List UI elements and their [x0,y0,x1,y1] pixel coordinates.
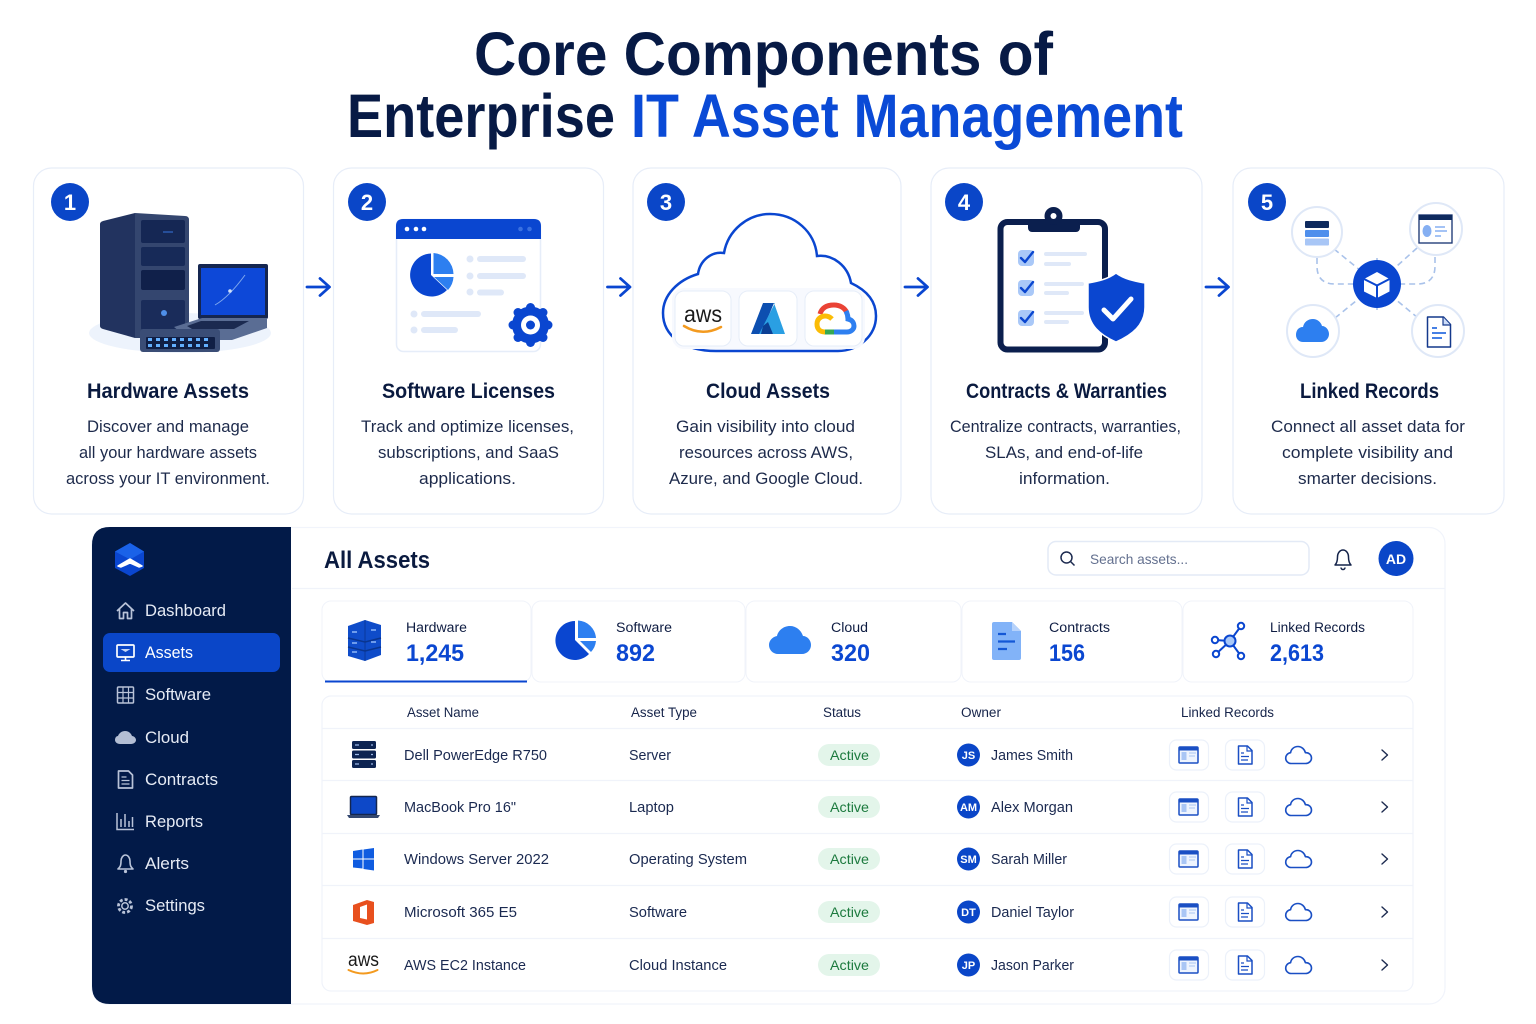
description: information. [1019,469,1110,488]
row: Microsoft 365 E5: Daniel Taylor [991,905,1074,921]
nav: software: Software [145,685,211,704]
nav: software [118,685,211,704]
row: Microsoft 365 E5: DT [961,907,976,919]
icon: cloud [769,626,811,654]
stat: hardware [322,601,531,682]
row: MacBook Pro: Active [830,799,869,815]
panel: contracts and warranties [931,168,1202,514]
row: Microsoft 365 E5: Active [830,904,869,920]
row: AWS EC2 Instance: Active [830,957,869,973]
title [347,20,1183,150]
row: Dell PowerEdge R750: JS [962,750,975,762]
aws logo: aws [684,301,722,327]
row: AWS EC2 Instance [348,950,1388,980]
row: Dell PowerEdge R750: Active [830,747,869,763]
panel: linked records [1233,168,1504,514]
table header: Asset Name [407,705,479,720]
nav: reports [117,812,203,831]
table header: Status [823,705,861,720]
stat: cloud: Cloud [831,620,868,635]
table header: Linked Records [1181,705,1274,720]
icon: laptop [347,796,380,818]
arrow 4 [1206,278,1228,296]
sidebar [92,527,291,1004]
icon: clipboard and shield [1000,207,1145,350]
row: Windows Server 2022: Sarah Miller [991,852,1067,868]
row: AWS EC2 Instance: JP [962,960,975,972]
icon: aws: aws [348,950,379,971]
search box [1048,542,1309,575]
stat: contracts: Contracts [1049,620,1110,635]
arrow 2 [608,278,630,296]
heading: Cloud Assets [706,380,830,403]
nav: settings [118,896,205,915]
icon: document [992,622,1021,660]
row: AWS EC2 Instance: Jason Parker [991,958,1074,974]
row: MacBook Pro [347,792,1388,822]
nav: cloud: Cloud [145,728,189,747]
table header: Owner [961,705,1002,720]
stat: contracts [962,601,1182,682]
stat: cloud: 320 [831,640,870,667]
page heading: All Assets [324,547,430,574]
nav: assets: Assets [145,643,193,662]
description [950,417,1181,488]
badge 1 [51,183,89,221]
row: MacBook Pro: Alex Morgan [991,800,1073,816]
row: Windows Server 2022: Active [830,851,869,867]
stat: hardware: Hardware [406,620,467,635]
stat: hardware: 1,245 [406,640,464,667]
row: Windows Server 2022: Operating System [629,852,747,868]
description: Azure, and Google Cloud. [669,469,863,488]
description [361,417,574,488]
badge 3: 3 [660,190,672,215]
icon: server tower, laptop and switch [89,213,271,353]
search box: Search assets... [1090,551,1188,567]
badge 4 [945,183,983,221]
panel: cloud assets [633,168,901,514]
row: MacBook Pro: Laptop [629,800,674,816]
nav: settings: Settings [145,896,205,915]
description [669,417,863,488]
table header: Asset Type [631,705,697,720]
panel: dashboard [92,527,1445,1004]
stat: software: 892 [616,640,655,667]
badge 2 [348,183,386,221]
icon: linked hub network [1287,203,1464,357]
google cloud logo [817,305,854,332]
title: Core Components of [474,20,1054,88]
heading: Linked Records [1300,380,1439,403]
description [1271,417,1465,488]
row: Dell PowerEdge R750: Dell PowerEdge R750 [404,748,547,764]
active nav highlight [103,633,280,672]
badge 4: 4 [958,190,971,215]
description: Connect all asset data for [1271,417,1465,436]
badge 1: 1 [64,190,76,215]
nav: assets [117,643,193,662]
description: complete visibility and [1282,443,1453,462]
arrow 3 [905,278,928,296]
nav: alerts [118,854,189,873]
icon: office [353,900,374,925]
panel: hardware assets [34,168,304,514]
badge 2: 2 [361,190,373,215]
row: Microsoft 365 E5: Microsoft 365 E5 [404,905,517,921]
user avatar: AD [1386,551,1406,567]
description: resources across AWS, [679,443,853,462]
row: Dell PowerEdge R750: Server [629,748,671,764]
badge 3 [647,183,685,221]
heading: Software Licenses [382,380,555,403]
icon: license window with pie and gear [396,219,552,352]
row: AWS EC2 Instance: AWS EC2 Instance [404,958,526,974]
user avatar [1378,541,1414,576]
badge 5 [1248,183,1286,221]
row: Windows Server 2022: SM [960,854,977,866]
stat: linked records [1183,601,1413,682]
description: Gain visibility into cloud [676,417,855,436]
nav: cloud [115,728,189,747]
icon: pie [555,620,596,660]
description: SLAs, and end-of-life [985,443,1143,462]
arrow 1 [307,278,330,296]
row: MacBook Pro: AM [960,802,977,814]
asset table [322,696,1413,991]
nav: contracts: Contracts [145,770,218,789]
stat: linked records: Linked Records [1270,620,1365,635]
title: Enterprise [347,82,615,150]
nav: reports: Reports [145,812,203,831]
row: AWS EC2 Instance: Cloud Instance [629,958,727,974]
stat: software [532,601,745,682]
azure logo [751,303,785,334]
stat: cloud [746,601,961,682]
title: IT Asset Management [631,82,1183,150]
icon: cloud with provider logos [663,214,876,351]
header bar [292,541,1445,588]
row: Dell PowerEdge R750 [352,740,1388,770]
logo [115,543,144,576]
panel: software licenses [334,168,604,514]
row: Windows Server 2022: Windows Server 2022 [404,852,549,868]
description: all your hardware assets [79,443,257,462]
icon: network [1212,623,1244,659]
badge 5: 5 [1261,190,1273,215]
icon: server [352,741,376,768]
row: Dell PowerEdge R750: James Smith [991,748,1073,764]
row: MacBook Pro: MacBook Pro 16" [404,800,516,816]
icon: windows [353,848,374,870]
description: applications. [419,469,516,488]
table header [407,705,1274,720]
stat: software: Software [616,620,672,635]
description: smarter decisions. [1298,469,1437,488]
heading: Contracts & Warranties [966,380,1167,403]
description: across your IT environment. [66,469,270,488]
description: Track and optimize licenses, [361,417,574,436]
heading: Hardware Assets [87,380,249,403]
nav: alerts: Alerts [145,854,189,873]
description: Centralize contracts, warranties, [950,417,1181,436]
description: Discover and manage [87,417,249,436]
row: Microsoft 365 E5: Software [629,905,687,921]
description [66,417,270,488]
description: subscriptions, and SaaS [378,443,559,462]
stat: linked records: 2,613 [1270,640,1324,667]
row: Windows Server 2022 [353,844,1388,874]
icon: hardware [348,620,381,661]
icon: bell [1335,550,1351,570]
nav: dashboard: Dashboard [145,601,226,620]
row: Microsoft 365 E5 [353,897,1388,927]
stat: contracts: 156 [1049,640,1085,667]
